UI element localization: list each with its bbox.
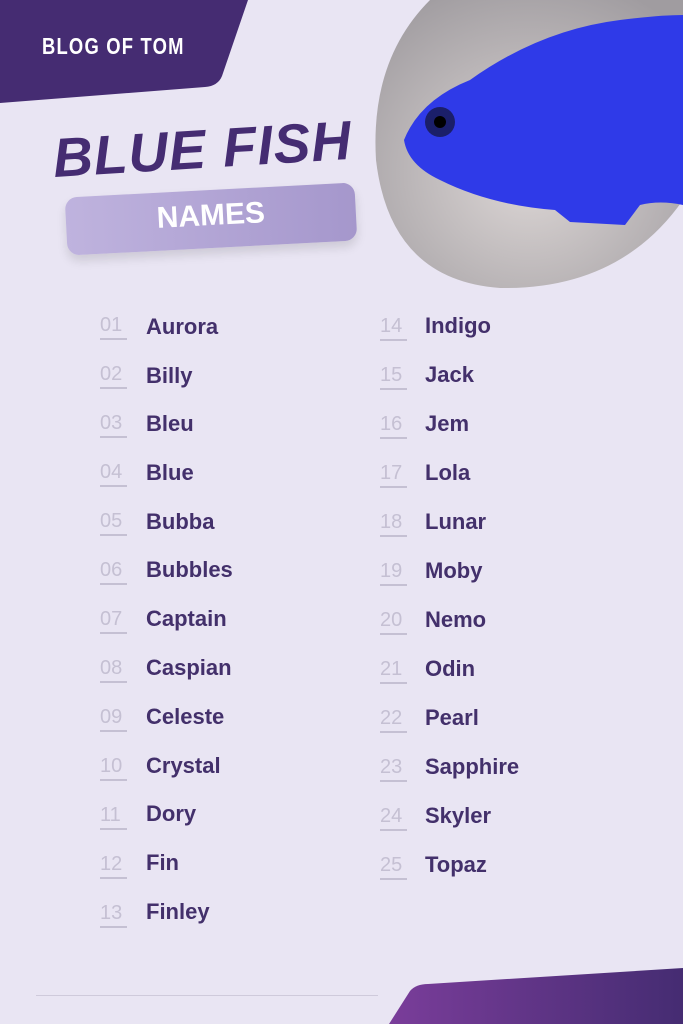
text: Bubbles bbox=[146, 557, 233, 582]
text: Celeste bbox=[146, 704, 224, 729]
text: Jem bbox=[425, 411, 469, 436]
text: Crystal bbox=[146, 753, 221, 778]
text: 19 bbox=[380, 560, 402, 582]
text: Dory bbox=[146, 801, 196, 826]
text: Lunar bbox=[425, 509, 486, 534]
text: 13 bbox=[100, 902, 122, 924]
text: 20 bbox=[380, 609, 402, 631]
text: 18 bbox=[380, 511, 402, 533]
subtitle pill bbox=[65, 182, 357, 256]
names list bbox=[100, 313, 519, 928]
text: Finley bbox=[146, 899, 210, 924]
text: Sapphire bbox=[425, 754, 519, 779]
text: Topaz bbox=[425, 852, 487, 877]
text: 23 bbox=[380, 756, 402, 778]
text: 17 bbox=[380, 462, 402, 484]
text: 05 bbox=[100, 510, 122, 532]
text: 04 bbox=[100, 461, 122, 483]
text: Skyler bbox=[425, 803, 491, 828]
text: Pearl bbox=[425, 705, 479, 730]
text: 22 bbox=[380, 707, 402, 729]
text: Moby bbox=[425, 558, 482, 583]
text: Nemo bbox=[425, 607, 486, 632]
text: 21 bbox=[380, 658, 402, 680]
text: 09 bbox=[100, 706, 122, 728]
text: Indigo bbox=[425, 313, 491, 338]
text: Captain bbox=[146, 606, 227, 631]
title: BLUE FISH bbox=[51, 109, 354, 189]
text: 15 bbox=[380, 364, 402, 386]
text: 01 bbox=[100, 314, 122, 336]
subtitle pill: NAMES bbox=[156, 196, 266, 235]
text: Odin bbox=[425, 656, 475, 681]
text: Fin bbox=[146, 850, 179, 875]
text: Bubba bbox=[146, 509, 214, 534]
text: 25 bbox=[380, 854, 402, 876]
text: 12 bbox=[100, 853, 122, 875]
text: Caspian bbox=[146, 655, 232, 680]
text: Billy bbox=[146, 363, 192, 388]
text: Lola bbox=[425, 460, 470, 485]
text: Aurora bbox=[146, 314, 218, 339]
text: 03 bbox=[100, 412, 122, 434]
text: Bleu bbox=[146, 411, 194, 436]
text: 02 bbox=[100, 363, 122, 385]
text: 14 bbox=[380, 315, 402, 337]
text: Blue bbox=[146, 460, 194, 485]
brand text: BLOG OF TOM bbox=[42, 33, 185, 59]
text: 06 bbox=[100, 559, 122, 581]
text: 08 bbox=[100, 657, 122, 679]
text: 11 bbox=[100, 804, 121, 826]
footer shape bbox=[389, 968, 683, 1024]
text: Jack bbox=[425, 362, 474, 387]
text: 07 bbox=[100, 608, 122, 630]
text: 16 bbox=[380, 413, 402, 435]
fish photo bbox=[375, 0, 683, 288]
text: 24 bbox=[380, 805, 402, 827]
banner: brand bbox=[0, 0, 248, 103]
text: 10 bbox=[100, 755, 122, 777]
